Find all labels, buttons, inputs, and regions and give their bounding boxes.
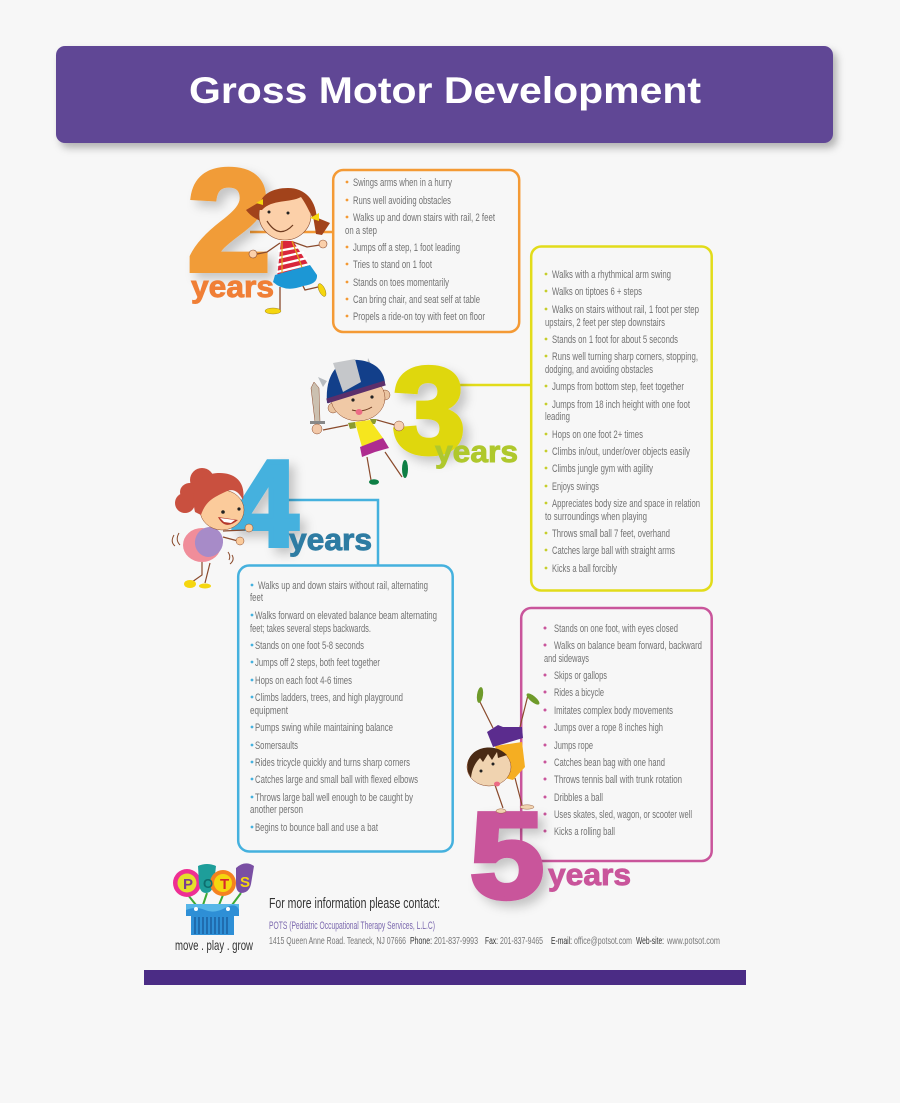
- address and contact line: Web-site:: [636, 935, 664, 947]
- list: 2 years skills: [345, 177, 495, 323]
- connector: 3 years: [450, 384, 531, 386]
- list: 5 years skills: Rides a bicycle: [554, 687, 604, 699]
- list: 4 years skills: Rides tricycle quickly and turns sharp corners: [255, 757, 410, 769]
- address and contact line: Fax:: [485, 935, 498, 947]
- heading: 3 years: years: [435, 434, 518, 469]
- list: 3 years skills: Stands on 1 foot for about 5 seconds: [552, 334, 678, 346]
- list: 2 years skills: Walks up and down stairs with rail, 2 feet: [353, 212, 495, 224]
- title banner: [56, 46, 833, 143]
- list: 5 years skills: Stands on one foot, with eyes closed: [554, 623, 678, 635]
- heading: 2 years: years: [191, 269, 274, 304]
- connector: 4 years: [270, 500, 378, 565]
- list: 5 years skills: Catches bean bag with one hand: [554, 757, 665, 769]
- icon: girl, age 2: [246, 188, 330, 314]
- heading: 4 years: years: [289, 522, 372, 557]
- icon: dancing girl, age 4: [172, 468, 253, 588]
- list: 2 years skills: Propels a ride-on toy with feet on floor: [353, 311, 485, 323]
- list: 4 years skills: Stands on one foot 5-8 seconds: [255, 640, 364, 652]
- list: 4 years skills: Hops on each foot 4-6 times: [255, 675, 352, 687]
- list: 3 years skills: Runs well turning sharp corners, stopping,: [552, 351, 698, 363]
- list: 3 years skills: to surroundings when playing: [545, 511, 647, 523]
- list: 3 years skills: Walks on tiptoes 6 + steps: [552, 286, 642, 298]
- logo: POTS flower pot: [173, 863, 254, 953]
- list: 4 years skills: Walks forward on elevated balance beam alternating: [255, 610, 437, 622]
- connector: 2 years: [250, 231, 333, 233]
- list: 3 years skills: Climbs jungle gym with agility: [552, 463, 653, 475]
- list: 5 years skills: Walks on balance beam forward, backward: [554, 640, 702, 652]
- list: 4 years skills: Somersaults: [255, 740, 298, 752]
- list: 4 years skills: Jumps off 2 steps, both feet together: [255, 657, 380, 669]
- contact heading: For more information please contact:: [269, 895, 440, 912]
- address and contact line: 201-837-9993: [434, 935, 478, 947]
- logo: POTS flower pot: T: [220, 876, 229, 893]
- list: 3 years skills: Appreciates body size and space in relation: [552, 498, 700, 510]
- logo: POTS flower pot: S: [240, 874, 250, 891]
- list: 3 years skills: [545, 269, 700, 575]
- footer bar: [144, 970, 746, 985]
- list: 4 years skills: [250, 580, 437, 834]
- list: 3 years skills: Walks with a rhythmical arm swing: [552, 269, 671, 281]
- heading: 5 years: years: [548, 857, 631, 892]
- address and contact line: E-mail:: [551, 935, 572, 947]
- list: 5 years skills: [544, 623, 702, 838]
- heading: 3 years: [393, 342, 518, 478]
- contact details: [269, 895, 720, 947]
- list: 4 years skills: Throws large ball well enough to be caught by: [255, 792, 413, 804]
- panel: 2 years: [333, 170, 519, 332]
- list: 5 years skills: Jumps rope: [554, 740, 593, 752]
- list: 4 years skills: Catches large and small ball with flexed elbows: [255, 774, 418, 786]
- list: 5 years skills: Uses skates, sled, wagon, or scooter well: [554, 809, 692, 821]
- panel: 5 years: [521, 608, 712, 861]
- address and contact line: 1415 Queen Anne Road. Teaneck, NJ 07666: [269, 935, 406, 947]
- list: 4 years skills: Begins to bounce ball and use a bat: [255, 822, 378, 834]
- list: 5 years skills: Jumps over a rope 8 inches high: [554, 722, 663, 734]
- address and contact line: 201-837-9465: [500, 935, 543, 947]
- title: Gross Motor Development: [189, 70, 701, 111]
- heading: 2 years: 2: [187, 140, 271, 302]
- list: 2 years skills: Tries to stand on 1 foot: [353, 259, 432, 271]
- address and contact line: Phone:: [410, 935, 432, 947]
- panel: 3 years: [531, 246, 712, 590]
- heading: 5 years: 5: [470, 788, 544, 924]
- logo tagline: move . play . grow: [175, 937, 254, 953]
- list: 3 years skills: upstairs, 2 feet per step downstairs: [545, 317, 665, 329]
- list: 4 years skills: Climbs ladders, trees, and high playground: [255, 692, 403, 704]
- address and contact line: office@potsot.com: [574, 935, 632, 947]
- address and contact line: [269, 935, 720, 947]
- heading: 5 years: [470, 788, 631, 924]
- list: 3 years skills: Enjoys swings: [552, 481, 599, 493]
- list: 3 years skills: Hops on one foot 2+ times: [552, 429, 643, 441]
- list: 5 years skills: and sideways: [544, 653, 589, 665]
- list: 4 years skills: another person: [250, 804, 303, 816]
- icon: handstand boy, age 5: [467, 687, 541, 813]
- list: 3 years skills: Walks on stairs without rail, 1 foot per step: [552, 304, 699, 316]
- list: 4 years skills: Walks up and down stairs without rail, alternating: [258, 580, 428, 592]
- list: 3 years skills: Catches large ball with straight arms: [552, 545, 675, 557]
- panel: 4 years: [238, 566, 453, 852]
- list: 2 years skills: Jumps off a step, 1 foot leading: [353, 242, 460, 254]
- list: 5 years skills: Kicks a rolling ball: [554, 826, 615, 838]
- list: 3 years skills: Kicks a ball forcibly: [552, 563, 617, 575]
- list: 4 years skills: Pumps swing while maintaining balance: [255, 722, 393, 734]
- list: 3 years skills: dodging, and avoiding obstacles: [545, 364, 653, 376]
- icon: boy with sword, age 3: [310, 358, 408, 485]
- heading: 4 years: [232, 436, 372, 572]
- list: 2 years skills: Swings arms when in a hurry: [353, 177, 452, 189]
- list: 5 years skills: Imitates complex body movements: [554, 705, 673, 717]
- address and contact line: www.potsot.com: [666, 935, 720, 947]
- list: 3 years skills: Climbs in/out, under/over objects easily: [552, 446, 690, 458]
- logo: POTS flower pot: O: [203, 876, 213, 891]
- list: 5 years skills: Throws tennis ball with trunk rotation: [554, 774, 682, 786]
- list: 2 years skills: Stands on toes momentarily: [353, 277, 449, 289]
- heading: 4 years: 4: [232, 436, 298, 572]
- list: 4 years skills: feet; takes several steps backwards.: [250, 623, 371, 635]
- list: 4 years skills: equipment: [250, 705, 288, 717]
- heading: 3 years: 3: [393, 342, 465, 478]
- list: 3 years skills: Jumps from 18 inch height with one foot: [552, 399, 690, 411]
- list: 5 years skills: Skips or gallops: [554, 670, 607, 682]
- list: 3 years skills: Throws small ball 7 feet, overhand: [552, 528, 670, 540]
- list: 2 years skills: Runs well avoiding obstacles: [353, 195, 451, 207]
- list: 5 years skills: Dribbles a ball: [554, 792, 603, 804]
- logo: POTS flower pot: P: [183, 876, 193, 893]
- list: 2 years skills: Can bring chair, and seat self at table: [353, 294, 480, 306]
- organisation name: POTS (Pediatric Occupational Therapy Services, L.L.C): [269, 920, 435, 932]
- list: 2 years skills: on a step: [345, 225, 377, 237]
- list: 4 years skills: feet: [250, 592, 263, 604]
- list: 3 years skills: Jumps from bottom step, feet together: [552, 381, 684, 393]
- list: 3 years skills: leading: [545, 411, 570, 423]
